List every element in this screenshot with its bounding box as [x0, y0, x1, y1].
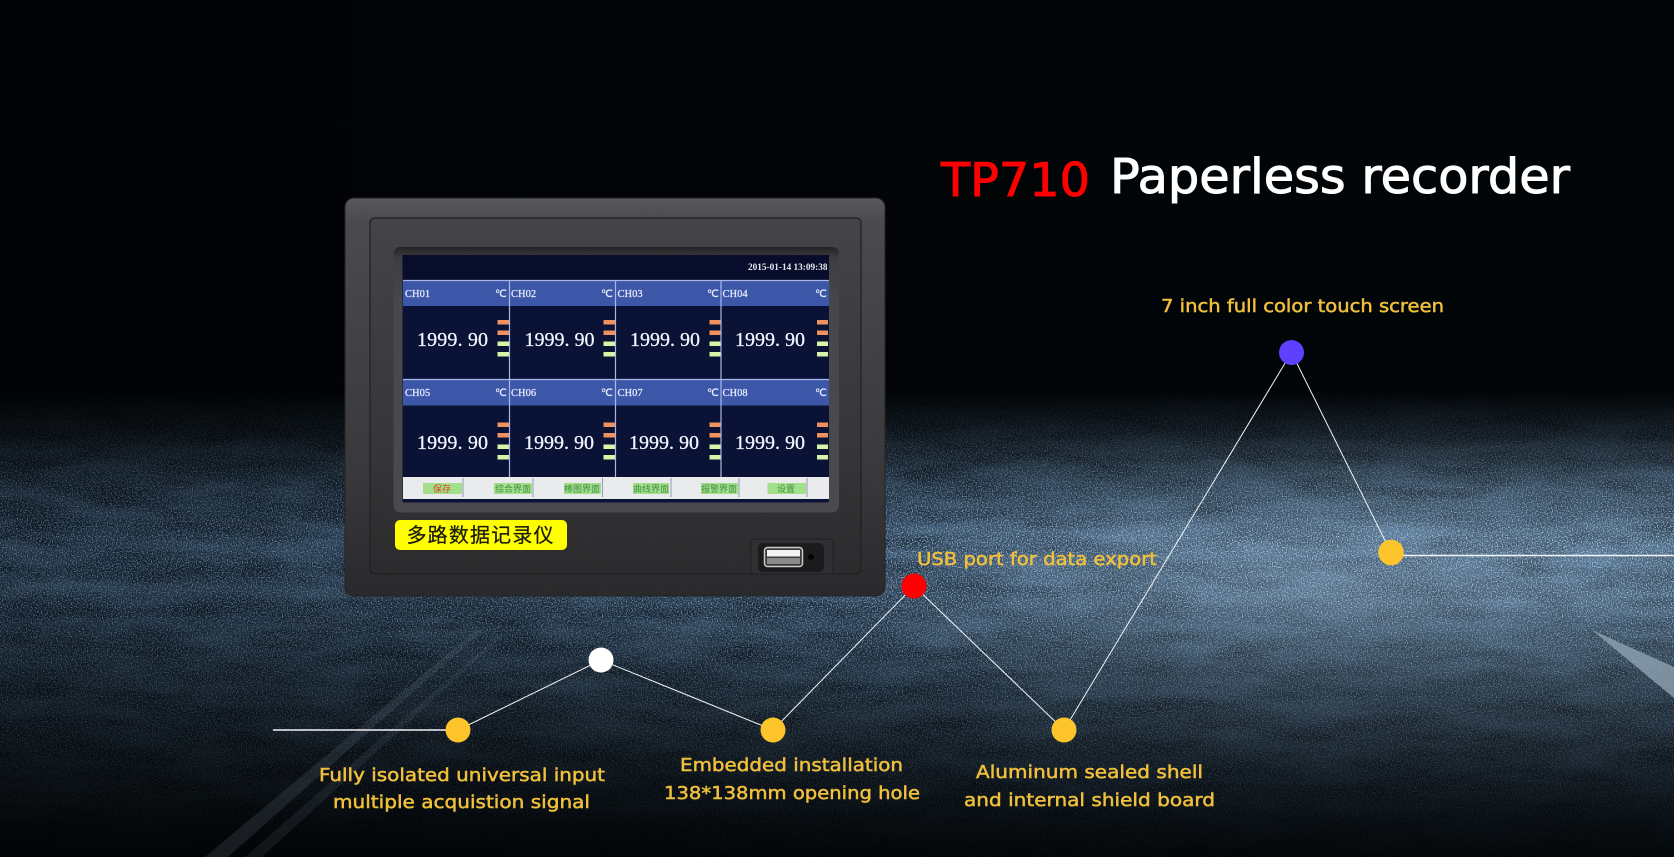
channel labels: ℃ [707, 289, 719, 300]
channel labels: CH05 [405, 388, 430, 399]
icon: USB port [751, 539, 833, 574]
text: aluminum shell feature: Aluminum sealed shell [976, 762, 1203, 783]
text: touch screen feature: 7 inch full color touch screen [1161, 296, 1444, 317]
channel readings: 1999. 90 [524, 329, 594, 351]
channel labels: ℃ [495, 289, 507, 300]
channel labels: CH03 [618, 289, 643, 300]
text: universal input feature: multiple acquistion signal [333, 792, 590, 813]
channel labels: CH01 [405, 289, 430, 300]
channel labels: ℃ [495, 388, 507, 399]
marker dot: right end [1378, 540, 1404, 565]
channel labels: CH02 [511, 289, 536, 300]
channel readings: 1999. 90 [417, 432, 488, 454]
text: embedded installation feature: Embedded installation [680, 755, 903, 776]
connector line path [273, 352, 1674, 730]
text: universal input feature [319, 765, 605, 813]
device outer bezel [345, 198, 885, 596]
marker dot: isolated input [446, 718, 470, 742]
screen grid lines [403, 280, 829, 477]
screen button bar: 报警界面 [701, 482, 737, 495]
marker dot: touch screen [1279, 340, 1304, 365]
yellow device label: 多路数据记录仪 [406, 519, 554, 548]
text: embedded installation feature [664, 755, 920, 804]
channel labels: CH06 [511, 388, 536, 399]
marker dot: USB port [902, 574, 926, 598]
screen timestamp: 2015-01-14 13:09:38 [748, 263, 828, 273]
text: aluminum shell feature [964, 762, 1215, 811]
alarm indicator bars: green [498, 342, 828, 460]
channel labels: CH08 [722, 388, 748, 399]
title: TP710 [940, 153, 1090, 207]
screen button bar: 综合界面 [495, 482, 531, 495]
background: dark asphalt road [0, 396, 1674, 857]
title [940, 149, 1570, 207]
channel labels: CH07 [618, 388, 643, 399]
title: Paperless recorder [1110, 149, 1570, 205]
screen button bar: 保存 [433, 482, 451, 495]
marker dot: embedded installation [760, 718, 786, 742]
channel labels [405, 289, 827, 399]
text: USB port feature: USB port for data export [917, 549, 1157, 570]
touch screen display [402, 255, 829, 502]
text: aluminum shell feature: and internal shield board [964, 790, 1215, 811]
text: universal input feature: Fully isolated universal input [319, 765, 605, 786]
channel labels: ℃ [815, 289, 827, 300]
channel readings: 1999. 90 [735, 432, 805, 454]
channel labels: ℃ [707, 388, 719, 399]
screen recess frame [394, 247, 839, 512]
channel readings: 1999. 90 [629, 432, 699, 454]
channel labels: ℃ [815, 388, 827, 399]
screen button bar: 曲线界面 [633, 482, 669, 495]
channel labels: ℃ [601, 289, 613, 300]
screen button bar: 棒图界面 [564, 482, 600, 495]
alarm indicator bars: orange [498, 320, 828, 438]
channel readings: 1999. 90 [417, 329, 488, 351]
channel header bands [403, 280, 829, 406]
marker dot: white peak [588, 648, 614, 672]
channel readings [417, 329, 805, 454]
channel labels: ℃ [601, 388, 613, 399]
channel readings: 1999. 90 [630, 329, 700, 351]
panel: TP710 recorder device [345, 198, 885, 596]
device inner faceplate [370, 218, 861, 574]
channel readings: 1999. 90 [735, 329, 805, 351]
channel readings: 1999. 90 [524, 432, 594, 454]
channel labels: CH04 [722, 289, 748, 300]
text: embedded installation feature: 138*138mm opening hole [664, 783, 920, 804]
screen button bar: 设置 [777, 482, 795, 495]
screen button bar [403, 477, 829, 499]
device surface grain [345, 198, 885, 596]
marker dot: aluminum shell [1052, 718, 1076, 742]
